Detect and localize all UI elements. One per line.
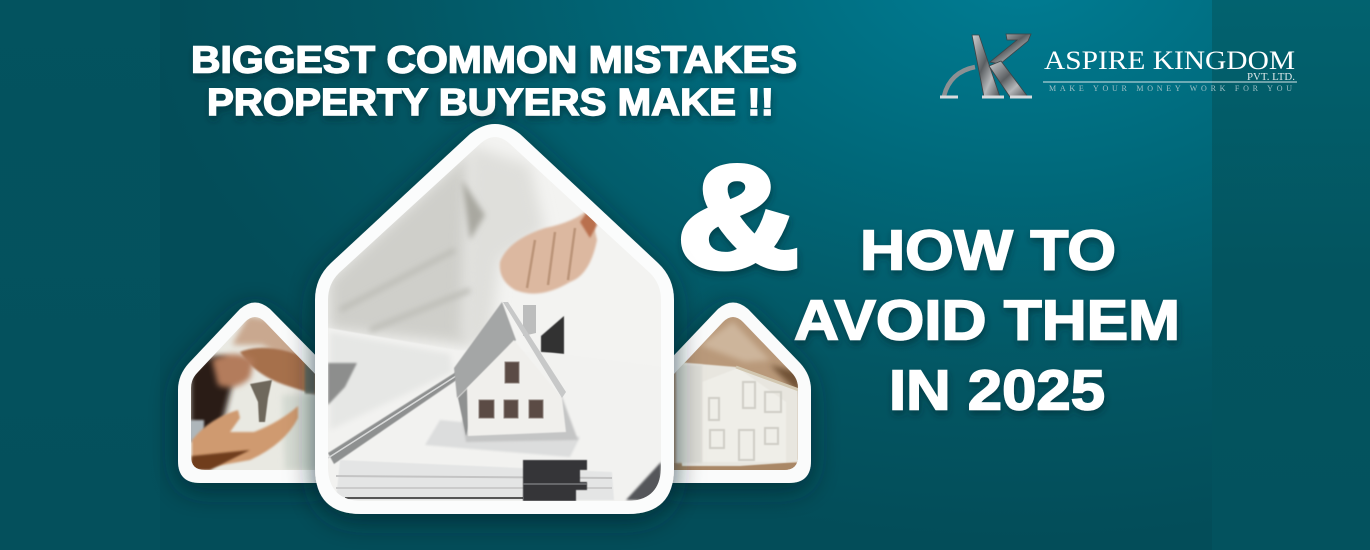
feet serifs bbox=[940, 96, 1032, 98]
main diagonal bbox=[972, 35, 1000, 97]
paper documents bbox=[328, 328, 564, 355]
K arm bbox=[990, 34, 1031, 64]
arm bbox=[240, 348, 316, 395]
logo rule bbox=[1043, 82, 1297, 83]
logo name: ASPIRE KINGDOM bbox=[1044, 45, 1295, 75]
left arc bbox=[944, 67, 975, 96]
subtitle line 3: IN 2025 bbox=[889, 358, 1105, 422]
windows bbox=[479, 362, 543, 418]
model house body bbox=[676, 362, 798, 466]
woman's hair bbox=[190, 356, 232, 432]
binder clip bbox=[523, 460, 587, 501]
woman's face bbox=[212, 354, 254, 387]
open hand bbox=[192, 406, 298, 468]
K leg bbox=[989, 61, 1028, 97]
photo frame: left, keys handover bbox=[178, 302, 330, 483]
model house windows bbox=[709, 382, 781, 460]
subtitle line 1: HOW TO bbox=[860, 218, 1116, 282]
text lines on sheet bbox=[425, 420, 580, 457]
wood table bbox=[674, 463, 797, 470]
house shadow on paper bbox=[462, 397, 578, 442]
photo frame: right, model house bbox=[660, 302, 811, 483]
title line 1: BIGGEST COMMON MISTAKES bbox=[191, 40, 797, 82]
subtitle: how to avoid them in 2025 bbox=[794, 218, 1180, 422]
papers stack bbox=[336, 460, 614, 500]
subtitle line 2: AVOID THEM bbox=[794, 288, 1180, 352]
logo mark AK bbox=[940, 34, 1032, 97]
pen bbox=[328, 372, 458, 464]
front wall bbox=[467, 340, 566, 436]
sleeve bbox=[230, 317, 306, 364]
ampersand: & bbox=[677, 135, 799, 298]
shirt bbox=[328, 150, 470, 345]
photo frame: main, hand over model house on documents bbox=[315, 124, 674, 514]
dark gap behind house bbox=[541, 316, 564, 354]
logo suffix: PVT. LTD. bbox=[1247, 72, 1295, 83]
model house bbox=[454, 302, 578, 442]
title bbox=[191, 40, 797, 124]
key bbox=[250, 380, 272, 422]
roof bbox=[454, 302, 516, 398]
hand bbox=[500, 208, 597, 294]
title line 2: PROPERTY BUYERS MAKE !! bbox=[207, 82, 774, 124]
logo: Aspire Kingdom bbox=[940, 34, 1297, 97]
logo tagline: MAKE YOUR MONEY WORK FOR YOU bbox=[1049, 84, 1292, 93]
chimney bbox=[523, 305, 536, 336]
